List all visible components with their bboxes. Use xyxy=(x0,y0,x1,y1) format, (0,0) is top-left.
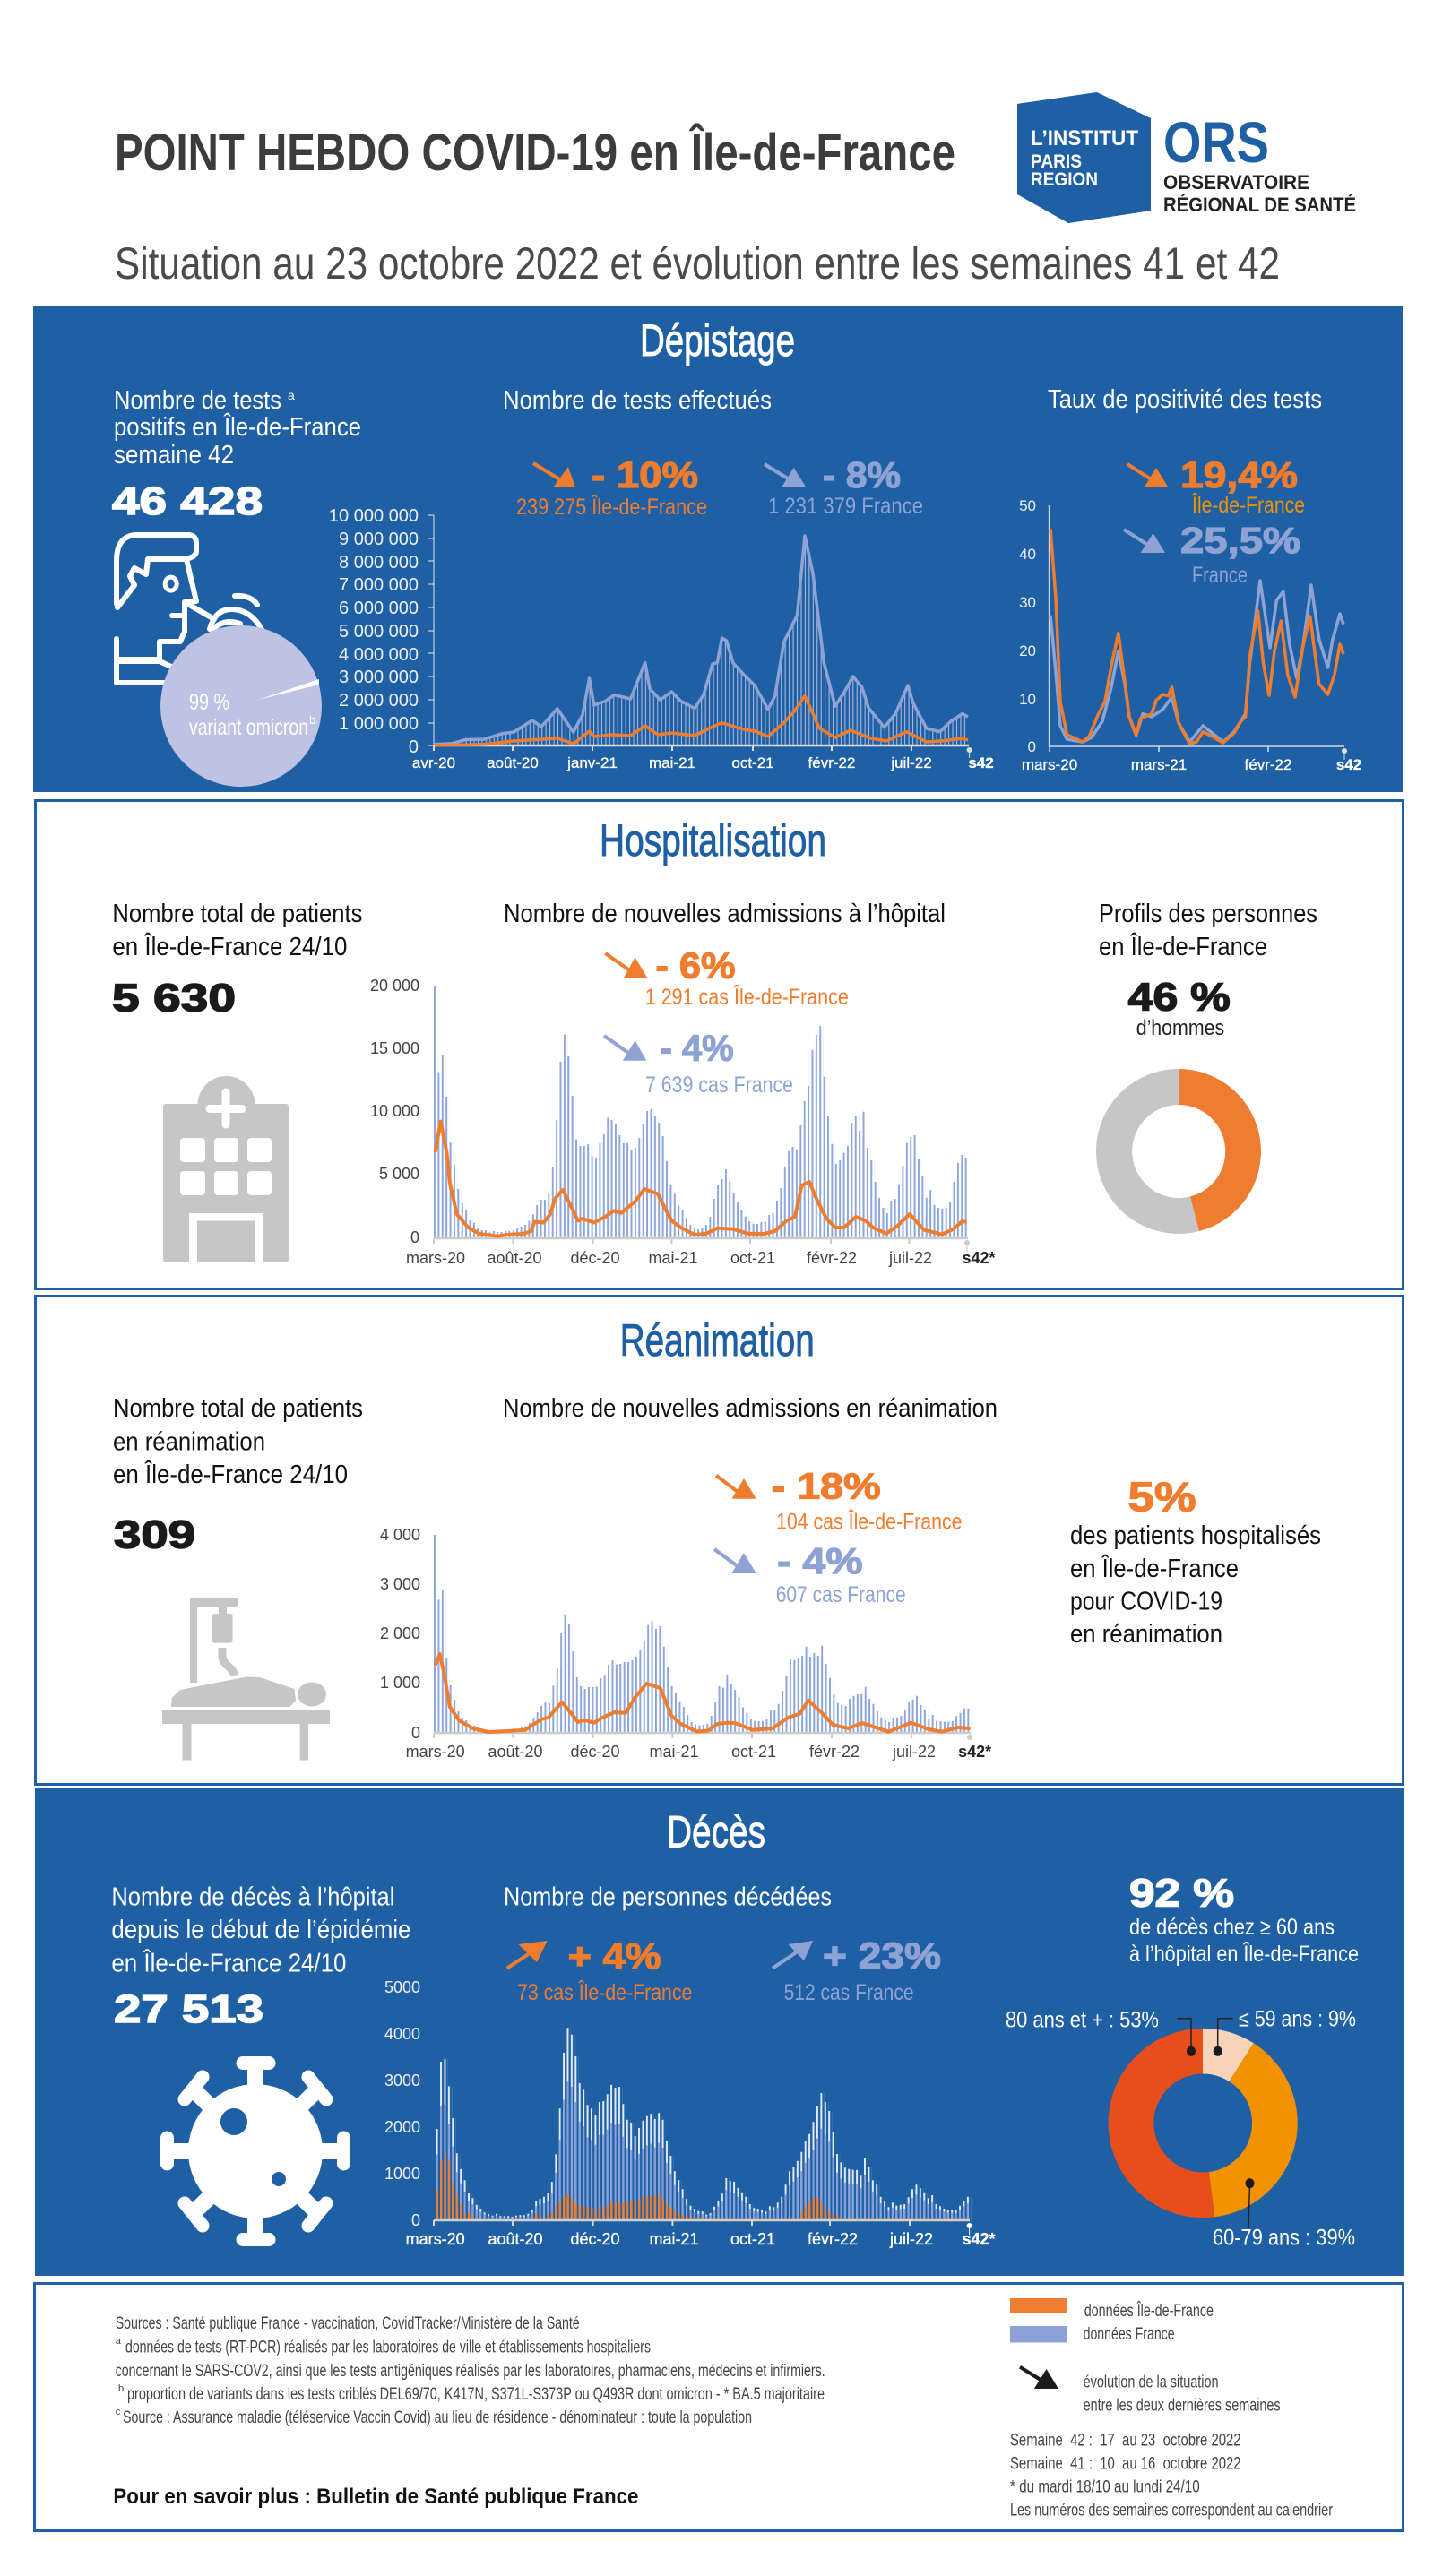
chart: admissions en réanimation: mai-21 xyxy=(649,1743,699,1761)
callout: Île-de-France tests xyxy=(516,454,707,520)
text block: profils: Profils des personnes xyxy=(1099,900,1317,928)
number: 46 % d'hommes: d’hommes xyxy=(1136,1016,1224,1040)
text block: part en réanimation: pour COVID-19 xyxy=(1070,1588,1222,1616)
legend: données: données Île-de-France xyxy=(1084,2301,1214,2321)
chart: admissions en réanimation: févr-22 xyxy=(809,1743,860,1761)
text block: sources: Source : Assurance maladie (téléservice Vaccin Covid) au lieu de résidence - dénominateur : toute la population xyxy=(123,2408,752,2427)
chart: admissions à l'hôpital: 20 000 xyxy=(370,977,419,995)
number: 46 428: 46 428 xyxy=(112,479,263,523)
chart: admissions en réanimation xyxy=(380,1526,991,1761)
callout: Île-de-France tests: 239 275 Île-de-France xyxy=(516,494,707,520)
chart: nombre de tests: 3 000 000 xyxy=(339,668,419,687)
heading: Réanimation: Réanimation xyxy=(620,1315,815,1366)
pie: variant omicron: 99 % xyxy=(189,690,229,715)
chart: personnes décédées: 5000 xyxy=(384,1978,420,1996)
chart: personnes décédées: mai-21 xyxy=(649,2230,699,2248)
panel: Hospitalisation xyxy=(36,801,1404,1288)
icon: person taking a swab test xyxy=(117,535,263,683)
chart: taux de positivité: 20 xyxy=(1019,642,1036,659)
text block: décès chez 60 ans et plus: à l’hôpital en Île-de-France xyxy=(1129,1941,1359,1967)
chart: personnes décédées: mars-20 xyxy=(406,2230,465,2248)
text block: nombre de décès: Nombre de décès à l’hôpital xyxy=(111,1883,394,1912)
chart: nombre de tests: s42 xyxy=(968,754,994,771)
chart: admissions à l'hôpital: 10 000 xyxy=(370,1102,419,1120)
number: 92 %: 92 % xyxy=(1129,1872,1234,1916)
chart: admissions à l'hôpital: s42* xyxy=(962,1249,996,1267)
chart: personnes décédées: 0 xyxy=(411,2211,420,2229)
heading: Décès: Décès xyxy=(667,1807,765,1857)
heading: taux de positivité: Taux de positivité des tests xyxy=(1048,385,1322,414)
text block: nombre de décès: en Île-de-France 24/10 xyxy=(111,1949,346,1978)
text block: patients xyxy=(112,900,362,961)
callout: décès Île-de-France: 73 cas Île-de-France xyxy=(517,1979,692,2005)
chart: nombre de tests: 8 000 000 xyxy=(339,553,419,573)
text block: tests positifs: positifs en Île-de-France xyxy=(114,412,361,442)
number: 46 % d'hommes: 46 % xyxy=(1128,976,1231,1020)
text block: tests positifs: Nombre de tests xyxy=(114,386,281,415)
chart: personnes décédées: déc-20 xyxy=(570,2230,620,2248)
chart: admissions à l'hôpital: févr-22 xyxy=(807,1249,857,1267)
legend: données: données France xyxy=(1084,2325,1175,2344)
chart: taux de positivité: 0 xyxy=(1028,738,1036,755)
text block: sources: Sources : Santé publique France - vaccination, CovidTracker/Ministère de la Santé xyxy=(116,2314,580,2333)
chart: nombre de tests: 6 000 000 xyxy=(339,599,419,618)
text block: sources xyxy=(116,2314,825,2427)
chart: nombre de tests: 5 000 000 xyxy=(339,622,419,642)
donut: décès par âge: 60-79 ans : 39% xyxy=(1213,2226,1355,2251)
chart: personnes décédées: févr-22 xyxy=(808,2230,858,2248)
pie: variant omicron xyxy=(160,625,322,787)
text block: sources: a xyxy=(116,2336,122,2347)
chart: personnes décédées: 1000 xyxy=(384,2165,420,2183)
chart: admissions à l'hôpital: 5 000 xyxy=(379,1165,419,1183)
chart: taux de positivité: mars-21 xyxy=(1131,756,1187,773)
callout: admissions Île-de-France: - 6% xyxy=(656,944,735,986)
chart: admissions en réanimation: 2 000 xyxy=(380,1624,420,1642)
chart: personnes décédées: juil-22 xyxy=(889,2230,933,2248)
chart: nombre de tests: 7 000 000 xyxy=(339,575,419,595)
text block: part en réanimation xyxy=(1070,1521,1321,1649)
chart: admissions en réanimation: déc-20 xyxy=(570,1743,620,1761)
callout: décès France: 512 cas France xyxy=(784,1980,914,2005)
text block: semaines xyxy=(1010,2431,1334,2520)
chart: nombre de tests: 4 000 000 xyxy=(339,645,419,665)
chart: personnes décédées: août-20 xyxy=(488,2230,543,2248)
legend: données xyxy=(1010,2298,1214,2344)
text block: tests positifs xyxy=(114,386,361,470)
chart: taux de positivité: 50 xyxy=(1019,497,1036,514)
chart: admissions à l'hôpital: 15 000 xyxy=(370,1039,419,1057)
callout: réanimation France: - 4% xyxy=(777,1540,862,1581)
text block: semaines: Semaine 41 : 10 au 16 octobre 2022 xyxy=(1010,2454,1241,2473)
icon: hospital xyxy=(163,1076,289,1262)
chart: admissions à l'hôpital: mars-20 xyxy=(406,1249,465,1267)
callout: décès Île-de-France: + 4% xyxy=(568,1935,661,1977)
chart: nombre de tests: 1 000 000 xyxy=(339,714,419,734)
chart: admissions à l'hôpital xyxy=(370,977,996,1267)
text block: pour en savoir plus: Pour en savoir plus : Bulletin de Santé publique France xyxy=(113,2485,638,2509)
chart: nombre de tests: avr-20 xyxy=(412,754,455,771)
heading: nouvelles admissions: Nombre de nouvelles admissions à l’hôpital xyxy=(504,900,946,928)
text block: patients en réanimation: Nombre total de patients xyxy=(113,1394,363,1423)
panel: Réanimation xyxy=(36,1296,1404,1785)
heading: personnes décédées: Nombre de personnes décédées xyxy=(504,1883,832,1912)
callout: admissions France: 7 639 cas France xyxy=(645,1073,793,1098)
chart: admissions à l'hôpital: août-20 xyxy=(487,1249,542,1267)
callout: positivité Île-de-France xyxy=(1127,454,1305,518)
callout: admissions Île-de-France: 1 291 cas Île-de-France xyxy=(645,984,849,1010)
legend: flèche d'évolution: évolution de la situation xyxy=(1084,2373,1219,2391)
number: 5 630: 5 630 xyxy=(112,977,236,1020)
pie: variant omicron: b xyxy=(309,713,315,727)
chart: nombre de tests: janv-21 xyxy=(566,754,618,771)
chart: taux de positivité: 10 xyxy=(1019,691,1036,708)
legend: flèche d'évolution: entre les deux dernières semaines xyxy=(1084,2396,1281,2415)
text block: semaines: Les numéros des semaines correspondent au calendrier xyxy=(1010,2501,1334,2520)
number: 5%: 5% xyxy=(1128,1474,1196,1521)
text block: patients en réanimation: en Île-de-France 24/10 xyxy=(113,1460,348,1489)
icon: virus xyxy=(167,2061,344,2242)
logo: L'Institut Paris Region: PARIS xyxy=(1031,151,1082,172)
heading: admissions en réanimation: Nombre de nouvelles admissions en réanimation xyxy=(503,1394,998,1423)
chart: admissions en réanimation: mars-20 xyxy=(406,1743,465,1761)
chart: personnes décédées: 3000 xyxy=(384,2072,420,2089)
chart: nombre de tests: oct-21 xyxy=(731,754,774,771)
callout: admissions France: - 4% xyxy=(661,1028,734,1069)
callout: positivité France xyxy=(1124,520,1300,588)
callout: réanimation Île-de-France: 104 cas Île-de-France xyxy=(776,1509,963,1535)
chart: taux de positivité: 30 xyxy=(1019,594,1036,611)
text block: sources: proportion de variants dans les tests criblés DEL69/70, K417N, S371L-S373P ou Q493R dont omicron - * BA.5 majoritaire xyxy=(127,2385,825,2404)
text block: décès chez 60 ans et plus xyxy=(1129,1915,1359,1967)
chart: personnes décédées: 2000 xyxy=(384,2118,420,2136)
text block: patients: en Île-de-France 24/10 xyxy=(112,932,347,961)
text block: profils: en Île-de-France xyxy=(1099,932,1267,961)
logo: L'Institut Paris Region: REGION xyxy=(1031,169,1098,190)
callout: décès France xyxy=(773,1935,941,2005)
heading: nombre de tests effectués: Nombre de tests effectués xyxy=(503,386,772,415)
title: POINT HEBDO COVID-19 en Île-de-France xyxy=(115,124,955,182)
callout: positivité Île-de-France: 19,4% xyxy=(1180,454,1298,495)
logo: ORS Observatoire régional de santé: RÉGIONAL DE SANTÉ xyxy=(1163,194,1356,216)
text block: sources: données de tests (RT-PCR) réalisés par les laboratoires de ville et établissements hospitaliers xyxy=(125,2339,651,2357)
chart: taux de positivité xyxy=(1019,497,1361,773)
callout: positivité France: France xyxy=(1192,563,1248,588)
pie: variant omicron: variant omicron xyxy=(189,715,308,740)
panel: Décès xyxy=(35,1788,1404,2276)
chart: admissions en réanimation: s42* xyxy=(958,1743,991,1761)
logo: ORS Observatoire régional de santé xyxy=(1163,110,1356,216)
callout: décès Île-de-France xyxy=(507,1935,692,2005)
chart: admissions en réanimation: août-20 xyxy=(488,1743,543,1761)
callout: positivité Île-de-France: Île-de-France xyxy=(1191,492,1305,518)
panel: sources et légende xyxy=(34,2283,1404,2530)
text block: décès chez 60 ans et plus: de décès chez ≥ 60 ans xyxy=(1129,1915,1335,1940)
donut: décès par âge: 80 ans et + : 53% xyxy=(1006,2008,1159,2033)
callout: Île-de-France tests: - 10% xyxy=(592,454,698,495)
callout: décès France: + 23% xyxy=(823,1935,941,1977)
chart: nombre de tests xyxy=(329,506,994,771)
number: 309: 309 xyxy=(114,1512,195,1557)
logo: L'Institut Paris Region: L’INSTITUT xyxy=(1031,126,1138,151)
logo: ORS Observatoire régional de santé: ORS xyxy=(1163,110,1269,175)
chart: admissions en réanimation: 0 xyxy=(411,1724,420,1742)
chart: nombre de tests: févr-22 xyxy=(808,754,855,771)
chart: nombre de tests: août-20 xyxy=(487,754,539,771)
chart: admissions en réanimation: 1 000 xyxy=(380,1674,420,1692)
callout: positivité France: 25,5% xyxy=(1180,520,1300,561)
text block: patients en réanimation xyxy=(113,1394,363,1489)
callout: France tests: 1 231 379 France xyxy=(768,494,923,519)
chart: nombre de tests: 0 xyxy=(409,737,419,757)
callout: France tests: - 8% xyxy=(823,454,901,495)
chart: admissions à l'hôpital: déc-20 xyxy=(570,1249,620,1267)
text block: part en réanimation: en Île-de-France xyxy=(1070,1554,1239,1583)
text block: sources: b xyxy=(118,2383,124,2394)
text block: tests positifs: a xyxy=(288,388,295,402)
chart: admissions en réanimation: 3 000 xyxy=(380,1575,420,1593)
chart: admissions en réanimation: 4 000 xyxy=(380,1526,420,1544)
text block: patients en réanimation: en réanimation xyxy=(113,1427,265,1456)
chart: personnes décédées: oct-21 xyxy=(730,2230,775,2248)
text block: part en réanimation: des patients hospitalisés xyxy=(1070,1521,1321,1550)
icon: patient on bed with drip xyxy=(162,1598,330,1760)
donut: décès par âge: ≤ 59 ans : 9% xyxy=(1239,2007,1356,2032)
chart: personnes décédées: s42* xyxy=(962,2230,996,2248)
donut: décès par âge xyxy=(1006,2007,1356,2251)
text block: semaines: Semaine 42 : 17 au 23 octobre 2022 xyxy=(1010,2431,1241,2450)
text block: nombre de décès xyxy=(111,1883,410,1978)
panel: Dépistage xyxy=(33,306,1403,792)
callout: admissions Île-de-France xyxy=(605,944,849,1010)
callout: réanimation Île-de-France xyxy=(716,1466,963,1535)
text block: profils xyxy=(1099,900,1317,961)
callout: réanimation France: 607 cas France xyxy=(776,1582,906,1607)
chart: personnes décédées: 4000 xyxy=(384,2025,420,2043)
chart: taux de positivité: s42 xyxy=(1336,756,1361,773)
number: 27 513: 27 513 xyxy=(114,1987,263,2031)
text block: sources: concernant le SARS-COV2, ainsi que les tests antigéniques réalisés par les laboratoires, pharmaciens, médecins et infirmiers. xyxy=(116,2362,825,2381)
chart: taux de positivité: mars-20 xyxy=(1022,756,1077,773)
chart: nombre de tests: 9 000 000 xyxy=(339,530,419,549)
text block: nombre de décès: depuis le début de l’épidémie xyxy=(111,1916,410,1944)
chart: nombre de tests: 10 000 000 xyxy=(329,506,419,526)
chart: nombre de tests: mai-21 xyxy=(649,754,695,771)
callout: France tests xyxy=(765,454,923,519)
text block: sources: c xyxy=(116,2407,121,2417)
text block: patients: Nombre total de patients xyxy=(112,900,362,928)
callout: réanimation Île-de-France: - 18% xyxy=(772,1466,881,1507)
chart: admissions à l'hôpital: mai-21 xyxy=(648,1249,698,1267)
legend: flèche d'évolution xyxy=(1020,2367,1281,2415)
heading: Dépistage: Dépistage xyxy=(640,315,795,366)
chart: admissions à l'hôpital: juil-22 xyxy=(888,1249,932,1267)
text block: semaines: * du mardi 18/10 au lundi 24/10 xyxy=(1010,2477,1200,2496)
chart: nombre de tests: 2 000 000 xyxy=(339,691,419,711)
chart: admissions à l'hôpital: 0 xyxy=(410,1228,419,1246)
chart: taux de positivité: févr-22 xyxy=(1245,756,1291,773)
chart: nombre de tests: juil-22 xyxy=(890,754,932,771)
donut: part d'hommes xyxy=(1096,1069,1261,1234)
logo: ORS Observatoire régional de santé: OBSERVATOIRE xyxy=(1163,171,1309,194)
heading: Hospitalisation: Hospitalisation xyxy=(600,815,826,866)
callout: réanimation France xyxy=(714,1540,906,1607)
text block: tests positifs: semaine 42 xyxy=(114,441,234,470)
callout: admissions France xyxy=(604,1028,793,1098)
number: 46 % d'hommes xyxy=(1128,976,1231,1040)
text block: part en réanimation: en réanimation xyxy=(1070,1620,1222,1649)
chart: admissions à l'hôpital: oct-21 xyxy=(730,1249,775,1267)
chart: personnes décédées xyxy=(384,1978,996,2248)
chart: taux de positivité: 40 xyxy=(1019,546,1036,563)
chart: admissions en réanimation: oct-21 xyxy=(731,1743,776,1761)
chart: admissions en réanimation: juil-22 xyxy=(892,1743,936,1761)
logo: L'Institut Paris Region xyxy=(1017,92,1151,223)
